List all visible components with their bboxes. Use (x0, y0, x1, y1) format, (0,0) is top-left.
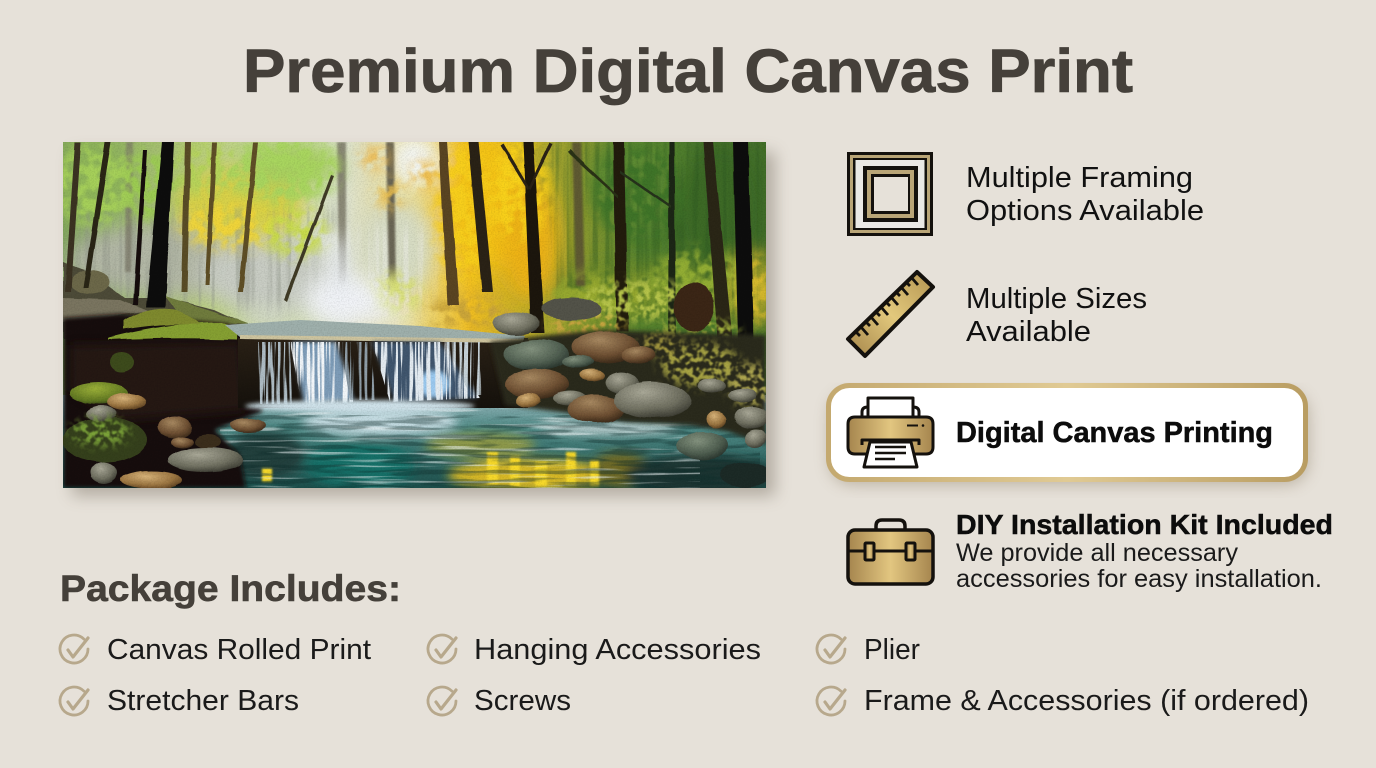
icon: toolbox (848, 520, 933, 584)
text: DIY installation kit (956, 509, 1333, 593)
item: screws: Screws (474, 685, 571, 717)
moss sprigs (70, 418, 130, 446)
heading: package includes: Package Includes: (60, 568, 401, 609)
checklist (60, 634, 1309, 717)
item: plier (817, 634, 920, 666)
right rock base (490, 330, 766, 445)
vertical forest streaks (63, 142, 766, 322)
icon: framing options (847, 152, 933, 236)
right boulders (492, 282, 771, 488)
item: hanging accessories: Hanging Accessories (474, 634, 761, 666)
canvas grain (63, 142, 766, 488)
undergrowth speckle (547, 280, 740, 353)
icon: ruler (848, 272, 933, 356)
ripples (220, 405, 700, 488)
pool (63, 395, 766, 488)
card label: Digital Canvas Printing (956, 417, 1273, 449)
text: multiple sizes: Multiple Sizes (966, 283, 1147, 315)
item: frame and accessories: Frame & Accessories (if ordered) (864, 685, 1309, 717)
waterfall crest (225, 320, 525, 343)
text: multiple framing options: Options Available (966, 195, 1204, 227)
item: canvas rolled print: Canvas Rolled Print (107, 634, 371, 666)
item: screws (428, 685, 571, 717)
waterfall sheets (292, 342, 478, 404)
item: plier: Plier (864, 634, 920, 666)
item: stretcher bars: Stretcher Bars (107, 685, 299, 717)
moss (108, 309, 238, 372)
mist plume (240, 235, 415, 326)
title: Premium Digital Canvas Print (243, 37, 1133, 105)
yellow reflections (262, 452, 599, 486)
misty grey trees (125, 142, 585, 290)
foam (245, 400, 475, 412)
right bank foliage (638, 335, 772, 407)
waterfall streaks (258, 342, 482, 406)
text: DIY installation kit: We provide all necessary (956, 539, 1238, 567)
highlighted card: digital canvas printing (828, 386, 1308, 484)
text: multiple sizes (966, 283, 1147, 348)
forest trunks (65, 142, 754, 350)
canvas print: forest waterfall painting (50, 130, 776, 496)
icon: printer (848, 398, 933, 467)
waterfall wall (238, 338, 528, 408)
text: multiple framing options: Multiple Framing (966, 162, 1193, 194)
left lower rocks (63, 382, 266, 489)
text: DIY installation kit: DIY Installation Kit Included (956, 509, 1333, 540)
left dark bank (63, 314, 262, 488)
pool colour masses (228, 410, 766, 488)
text: multiple sizes: Available (966, 316, 1091, 348)
forest colour masses (50, 130, 776, 325)
left bank rocks (63, 262, 250, 340)
text: DIY installation kit: accessories for easy installation. (956, 565, 1322, 593)
leaf clusters (53, 138, 775, 326)
text: multiple framing options (966, 162, 1204, 227)
